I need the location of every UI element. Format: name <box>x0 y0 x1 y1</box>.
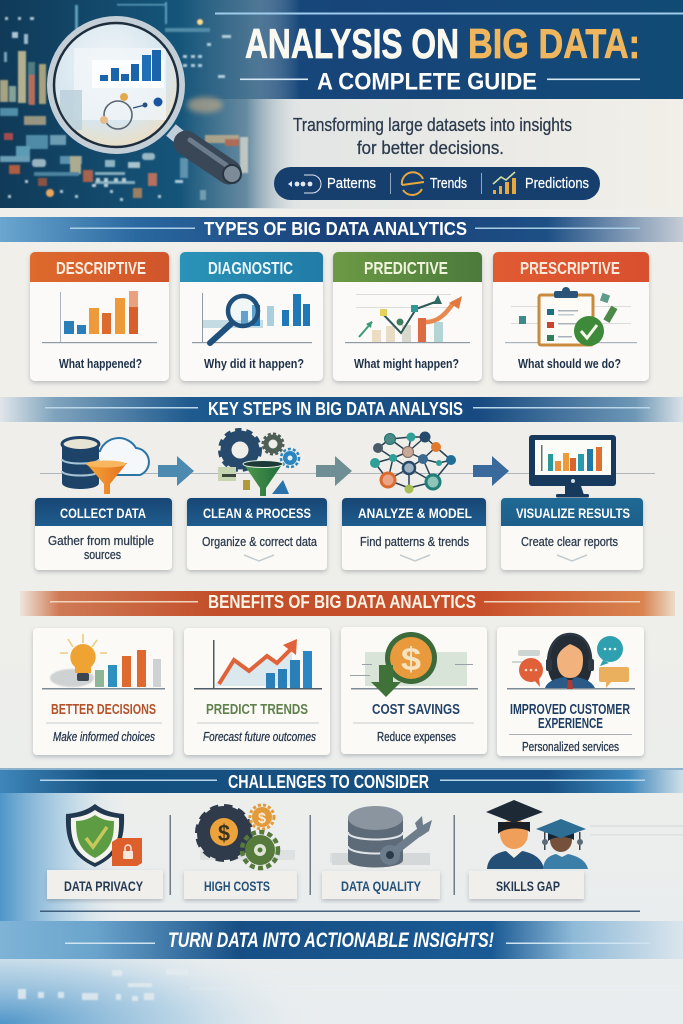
icon: gears with dollar: $ <box>258 810 267 827</box>
section: types of big data analytics <box>0 217 683 381</box>
left blue wash <box>0 793 130 921</box>
card: improved customer experience <box>497 627 644 756</box>
icon: shield and lock <box>66 804 142 867</box>
card question: Why did it happen? <box>204 356 304 371</box>
card question: What should we do? <box>518 356 621 371</box>
benefit description: Reduce expenses <box>377 730 456 744</box>
card: predict trends <box>184 628 330 755</box>
benefit description: Personalized services <box>522 740 619 754</box>
benefit title: COST SAVINGS <box>372 702 460 718</box>
main title highlight: BIG DATA: <box>468 20 640 67</box>
icon: monitor <box>529 435 616 498</box>
section banner: TYPES OF BIG DATA ANALYTICS <box>204 219 467 239</box>
icon: patterns <box>288 175 321 193</box>
section banner: KEY STEPS IN BIG DATA ANALYSIS <box>208 399 463 419</box>
card heading: DESCRIPTIVE <box>56 258 146 278</box>
subtitle heading: A COMPLETE GUIDE <box>317 68 537 96</box>
label tile: data privacy <box>47 870 163 899</box>
step: collect data <box>35 498 172 570</box>
icon: bar chart <box>42 291 157 343</box>
icon: graduates <box>486 800 588 869</box>
step: visualize results: VISUALIZE RESULTS <box>516 505 630 521</box>
section: challenges <box>0 768 683 921</box>
card: diagnostic <box>180 252 323 381</box>
benefit title: BETTER DECISIONS <box>51 702 156 718</box>
card: cost savings <box>341 627 487 754</box>
hero header <box>0 0 683 209</box>
step: collect data: sources <box>84 547 121 562</box>
step: collect data: COLLECT DATA <box>60 505 146 521</box>
arrow <box>473 456 509 486</box>
icon: forecast chart <box>345 294 470 343</box>
icon: coin and down arrow: $ <box>401 641 421 677</box>
icon: network <box>370 432 456 494</box>
arrow <box>158 456 194 486</box>
magnifier handle <box>171 130 241 183</box>
icon: gears with dollar: $ <box>218 820 230 846</box>
step: clean and process: CLEAN & PROCESS <box>203 505 311 521</box>
section banner <box>0 397 683 422</box>
card: descriptive <box>30 252 169 381</box>
label: predictions: Predictions <box>525 175 589 192</box>
step: collect data: Gather from multiple <box>48 533 154 548</box>
label tile: data quality <box>322 871 440 899</box>
faint horizontal streaks <box>200 825 683 863</box>
label: trends: Trends <box>430 175 467 192</box>
footer data pixels <box>18 969 680 1001</box>
icon: gears with dollar <box>198 805 278 868</box>
icon: support agent <box>507 634 635 690</box>
benefit title: IMPROVED CUSTOMER <box>510 702 630 718</box>
benefit title <box>510 702 630 732</box>
icon: magnifier over chart <box>192 293 312 343</box>
divider line <box>40 910 640 912</box>
tagline: Transforming large datasets into insights <box>293 114 572 135</box>
label tile: high costs: HIGH COSTS <box>204 878 270 894</box>
icon: database and wrench <box>332 806 432 868</box>
benefit title: EXPERIENCE <box>538 716 603 732</box>
step: visualize results: Create clear reports <box>521 534 618 549</box>
section banner: BENEFITS OF BIG DATA ANALYTICS <box>208 592 476 612</box>
top rule <box>215 12 683 14</box>
step: analyze and model <box>342 498 486 570</box>
step: visualize results <box>501 498 643 570</box>
label tile: skills gap <box>469 871 584 899</box>
tagline: for better decisions. <box>357 137 504 158</box>
label: patterns: Patterns <box>327 175 376 192</box>
section banner <box>0 770 683 793</box>
icon: rising trend <box>194 639 322 690</box>
card question: What happened? <box>59 356 142 371</box>
arrow <box>316 456 352 486</box>
card heading: PREDICTIVE <box>364 258 448 278</box>
main title: ANALYSIS ON <box>245 20 459 67</box>
section: key steps <box>0 397 683 570</box>
data city background <box>0 0 300 208</box>
benefit description: Forecast future outcomes <box>203 730 316 744</box>
step: clean and process <box>187 498 327 570</box>
step: clean and process: Organize & correct data <box>202 534 318 549</box>
pill: patterns trends predictions <box>274 167 600 200</box>
section banner <box>0 217 683 242</box>
label tile: data privacy: DATA PRIVACY <box>64 878 144 894</box>
section banner <box>20 591 675 616</box>
step: analyze and model: ANALYZE & MODEL <box>358 505 472 521</box>
card heading: PRESCRIPTIVE <box>520 258 620 278</box>
icon: gears and funnel <box>218 431 299 496</box>
card: prescriptive <box>493 252 649 381</box>
icon: lightbulb and bars <box>42 634 165 690</box>
label tile: data quality: DATA QUALITY <box>341 878 422 894</box>
tagline <box>293 114 572 158</box>
label tile: skills gap: SKILLS GAP <box>496 878 560 894</box>
card heading: DIAGNOSTIC <box>208 258 293 278</box>
section: benefits <box>20 591 675 756</box>
card question: What might happen? <box>354 356 459 371</box>
title rule right <box>547 78 640 80</box>
call to action banner <box>0 921 683 959</box>
icon: trends <box>402 172 424 195</box>
label tile: high costs <box>184 871 297 899</box>
call to action banner: TURN DATA INTO ACTIONABLE INSIGHTS! <box>168 929 494 952</box>
icon: predictions <box>493 172 516 194</box>
bottom blue corner wash <box>0 921 330 1024</box>
benefit title: PREDICT TRENDS <box>206 702 308 718</box>
icon: database and cloud <box>62 438 149 494</box>
step: analyze and model: Find patterns & trends <box>360 534 469 549</box>
benefit description: Make informed choices <box>53 730 155 744</box>
subtitle panel <box>200 99 683 209</box>
section banner: CHALLENGES TO CONSIDER <box>228 772 429 792</box>
card: better decisions <box>33 628 173 755</box>
title rule left <box>240 78 308 80</box>
card: predictive <box>333 252 482 381</box>
lens chart <box>60 48 166 130</box>
icon: coin and down arrow <box>350 632 478 697</box>
icon: magnifying glass <box>47 16 241 183</box>
icon: checklist <box>505 287 637 346</box>
title band <box>0 0 683 99</box>
